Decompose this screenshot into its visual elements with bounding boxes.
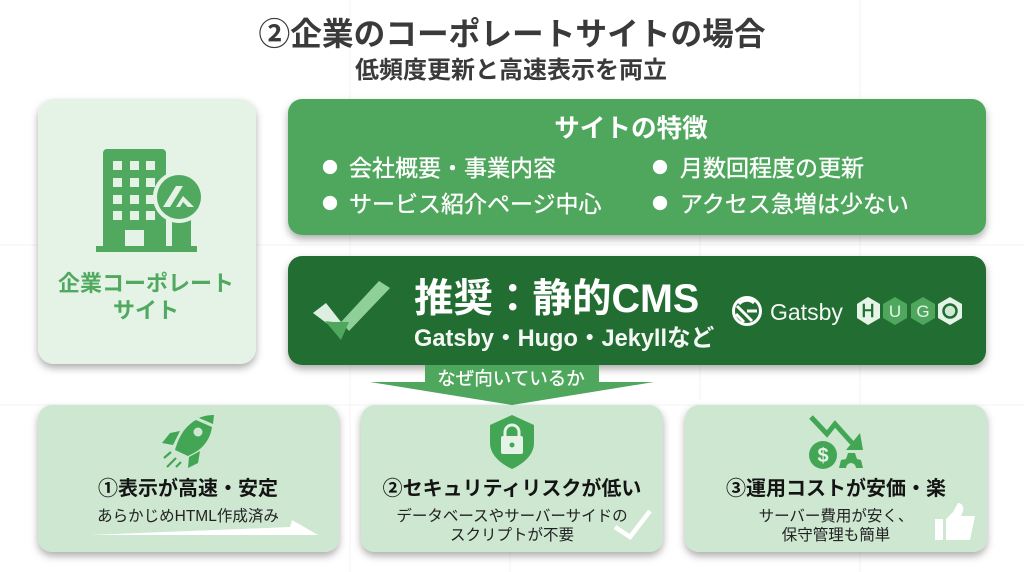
- icon: cost down: $: [817, 445, 829, 467]
- feature list: アクセス急増は少ない: [680, 191, 909, 217]
- panel: fast and stable: [38, 405, 339, 552]
- recommended tools: Gatsby・Hugo・Jekyllなど: [414, 325, 715, 352]
- panel: low operating cost: 保守管理も簡単: [782, 526, 890, 544]
- logo: Hugo: H: [862, 301, 874, 321]
- card text: サーバー費用が安く、: [759, 507, 913, 525]
- feature list: 月数回程度の更新: [680, 155, 864, 181]
- card title: ③運用コストが安価・楽: [726, 476, 946, 500]
- feature list: 会社概要・事業内容: [349, 155, 556, 181]
- feature list: [323, 155, 909, 217]
- logo: Gatsby: Gatsby: [770, 299, 843, 325]
- card title: ②セキュリティリスクが低い: [383, 476, 641, 500]
- icon: thumbs up: [935, 503, 975, 540]
- arrow: why suitable: なぜ向いているか: [437, 368, 585, 389]
- recommendation heading: 推奨：静的CMS: [414, 277, 699, 321]
- icon: white check: [615, 511, 650, 537]
- icon: shield with lock: [490, 415, 534, 469]
- panel: recommendation: [288, 256, 986, 365]
- panel: low security risk: スクリプトが不要: [450, 526, 574, 544]
- icon: office building: [96, 149, 205, 252]
- panel: low operating cost: [685, 405, 987, 552]
- panel: corporate site: [38, 99, 256, 364]
- icon: cost down: [809, 417, 863, 469]
- feature list: サービス紹介ページ中心: [349, 191, 602, 217]
- panel: site features: [288, 99, 986, 235]
- subtitle: 低頻度更新と高速表示を両立: [355, 57, 667, 84]
- card text: あらかじめHTML作成済み: [97, 507, 279, 525]
- card text: データベースやサーバーサイドの: [396, 506, 628, 525]
- card title: ①表示が高速・安定: [98, 476, 278, 500]
- arrow: why suitable: [370, 365, 654, 405]
- panel: corporate site: サイト: [113, 298, 179, 323]
- arrow: speed: [90, 520, 318, 535]
- features heading: サイトの特徴: [554, 114, 708, 143]
- panel: low security risk: [361, 405, 663, 552]
- logo: Hugo: [857, 297, 962, 325]
- logo: Hugo: U: [889, 302, 901, 321]
- icon: rocket: [162, 415, 214, 468]
- logo: Hugo: G: [916, 302, 930, 321]
- title: ②企業のコーポレートサイトの場合: [258, 16, 766, 52]
- icon: check mark: [313, 281, 390, 340]
- panel label: 企業コーポレート: [58, 271, 234, 296]
- logo: Gatsby: [734, 298, 843, 325]
